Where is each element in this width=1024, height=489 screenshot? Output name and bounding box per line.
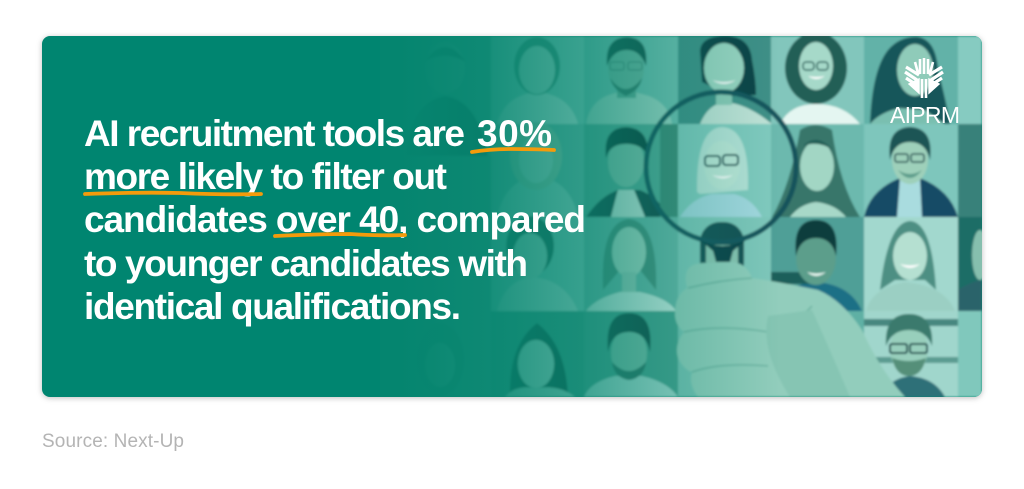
person: smiling man in blue shirt (771, 220, 862, 311)
person: partial man at right edge (960, 228, 982, 310)
person: ginger man with glasses (880, 314, 945, 397)
person: dark-haired woman smiling (700, 36, 772, 124)
headline statement (84, 113, 586, 327)
person: smiling woman with long hair (866, 221, 955, 311)
tile backgrounds (468, 36, 982, 397)
line 5: identical qualifications. (84, 286, 461, 327)
icon: logo hexagon mark (905, 58, 943, 98)
person: bearded man in lower row (584, 313, 678, 397)
line 3: candidates over 40, compared (84, 199, 586, 240)
person: long dark-haired woman (870, 37, 950, 124)
faded person: dark-haired woman (506, 216, 578, 312)
person: young man in suit (586, 124, 678, 217)
person: head behind the magnifier handle (699, 220, 746, 266)
person: brown-haired woman (772, 125, 860, 217)
photo collage of candidates (424, 36, 982, 397)
faded person: short-haired woman (497, 37, 578, 124)
line 4: to younger candidates with (84, 243, 528, 284)
person: bearded man (586, 37, 672, 124)
line 2: more likely to filter out (84, 156, 447, 197)
line 1: 30% (477, 113, 553, 154)
person: blonde woman in white top (586, 219, 676, 311)
icon: magnifying glass (646, 92, 796, 262)
logo: AIPRM (890, 58, 960, 128)
logo wordmark: AIPRM (890, 102, 960, 128)
faded person: asian woman (505, 323, 575, 397)
left-to-right teal gradient overlay (397, 36, 763, 397)
faded person: suited man (464, 109, 486, 155)
faded person: left woman (416, 324, 464, 396)
line 1: AI recruitment tools are (84, 113, 465, 154)
source note: Source: Next-Up (42, 431, 184, 452)
person: curly-haired woman with glasses (780, 32, 860, 124)
panel: teal card background (42, 36, 982, 397)
faded person: blonde woman with glasses (502, 125, 578, 217)
orange highlight underlines (85, 149, 554, 236)
person: senior blonde woman in glasses (680, 127, 762, 217)
person: man in navy suit and glasses (864, 127, 958, 217)
hand holding the magnifier (675, 262, 905, 397)
